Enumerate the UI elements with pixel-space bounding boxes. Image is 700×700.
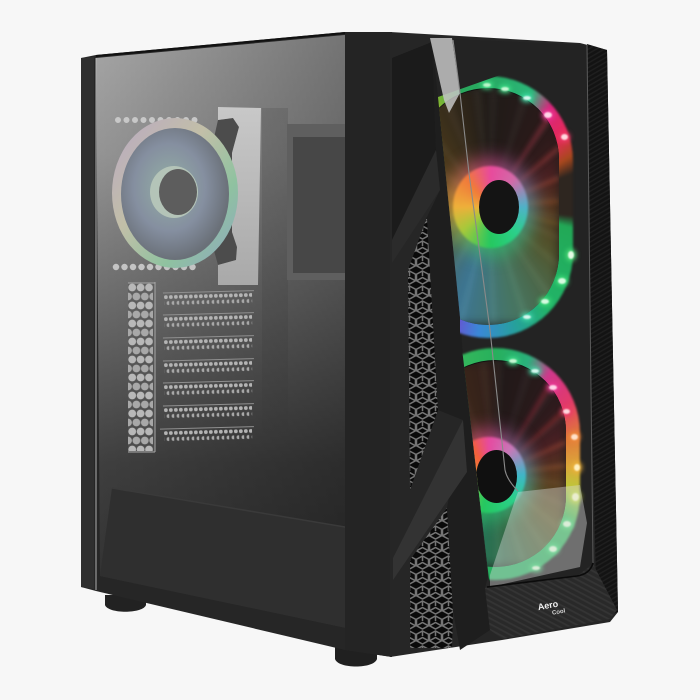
upper diagonal band [392,150,440,263]
fan window: bottom RGB fan [462,346,586,582]
fan 1 hub ring [453,166,528,248]
glass panel [96,35,347,630]
carbon base plate [485,564,617,639]
cooler fan ring [112,118,238,268]
fan 1 red streaks [512,118,559,226]
fan 1 outer ring [438,76,574,340]
front left vertical blade [427,42,490,650]
fan 2 outer ring [462,346,582,582]
fan 1 hub [479,180,519,234]
case body and side panel [81,32,618,666]
foot: right [335,645,377,666]
glass highlight edge [95,58,97,590]
fan 2 red streaks [513,382,566,472]
front pillar [345,32,392,657]
fan 1 colour wash [439,92,559,325]
upper dark facet [392,42,436,240]
fan 2 colour wash [464,362,566,567]
fan window: top RGB fan [438,76,580,340]
expansion slots [160,291,254,442]
front fascia [390,32,618,657]
glass seam line [453,40,518,491]
cooler fan disc [121,128,229,260]
fan 1 hub glow [445,158,536,256]
glass reflection: lower right [490,485,587,587]
glass reflection: top [430,38,460,113]
base plate top edge [487,563,593,587]
fan 2 hub ring [472,436,528,514]
fan 2 hub glow [444,429,534,521]
top edge [96,33,345,56]
right side strip [587,44,618,620]
logo text: Aero [537,599,559,612]
logo sub text: Cool [552,608,566,617]
cooler fan hub [159,169,197,215]
window edge highlight [587,45,593,563]
logo [537,598,566,619]
lower mesh [410,508,453,648]
radiator dark backing [214,118,239,265]
fan 1 LEDs [479,79,580,323]
rear tray column [262,108,288,219]
cpu cooler bracket [218,107,261,285]
fan 1 blade streaks [417,89,559,325]
cooler fan hub crescent [150,166,198,218]
expansion vent column [128,282,155,452]
psu shroud [100,488,345,628]
foot: left [105,595,146,612]
fan 2 blade streaks [424,361,566,567]
motherboard tray panel [287,124,347,280]
fan 2 blades [464,360,566,567]
lower diagonal band [393,420,467,580]
fan 2 LEDs [504,355,586,575]
cooler hole strips [116,120,197,267]
rear strip [81,57,94,589]
side panel frame [81,32,392,657]
fan window panel [430,38,593,588]
fan 2 hub [476,450,517,503]
upper mesh [408,217,438,490]
fan 1 blades [439,88,559,325]
